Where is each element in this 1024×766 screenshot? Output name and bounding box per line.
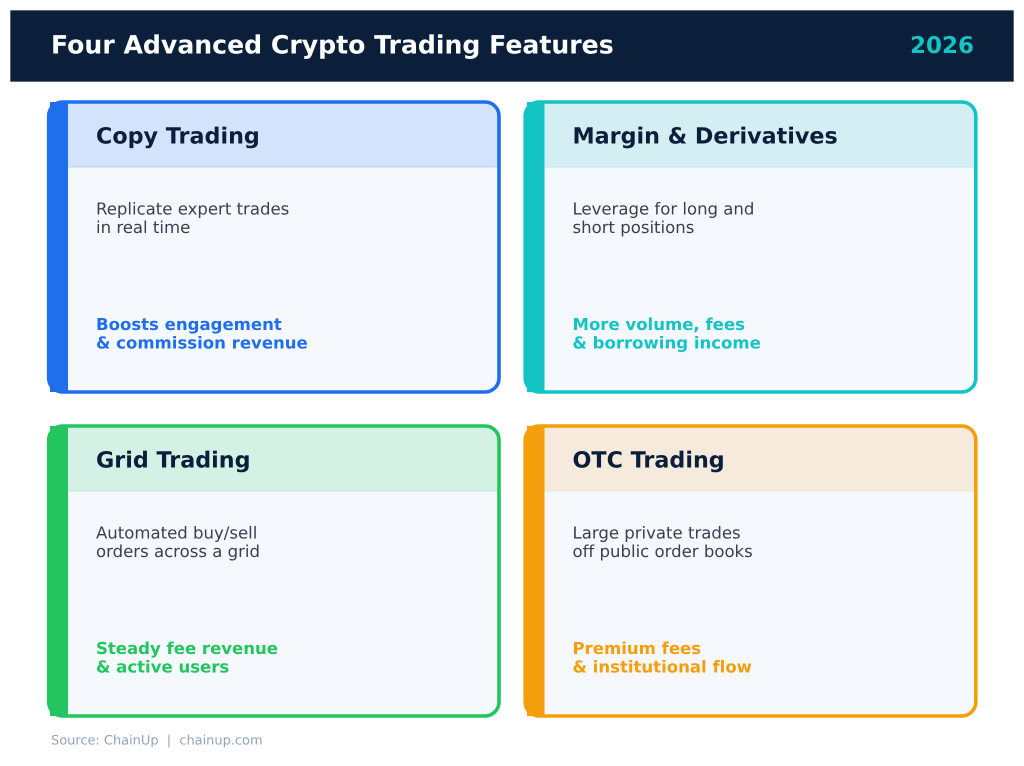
source footer: Source: ChainUp | chainup.com [51, 734, 263, 748]
benefit: Boosts engagement [96, 315, 282, 334]
description: Leverage for long and [572, 200, 754, 218]
description: Automated buy/sell [96, 524, 257, 542]
benefit: & borrowing income [572, 334, 761, 352]
panel: OTC Trading [525, 426, 976, 716]
heading: OTC Trading [572, 448, 725, 474]
description: off public order books [572, 542, 753, 561]
heading: Copy Trading [96, 124, 260, 150]
description: Large private trades [572, 524, 741, 542]
benefit: & active users [96, 658, 229, 676]
benefit: & commission revenue [96, 334, 308, 352]
benefit: Steady fee revenue [96, 639, 278, 658]
heading: Margin & Derivatives [572, 124, 838, 150]
benefit: Premium fees [572, 639, 701, 658]
title: Four Advanced Crypto Trading Features [51, 30, 614, 60]
benefit: & institutional flow [572, 658, 752, 676]
description: orders across a grid [96, 542, 260, 561]
heading: Grid Trading [96, 448, 251, 474]
benefit: More volume, fees [572, 315, 745, 334]
panel: Margin & Derivatives [525, 102, 976, 392]
panel: Grid Trading [49, 426, 499, 716]
description: in real time [96, 218, 190, 237]
header banner [10, 10, 1014, 82]
year: 2026 [910, 33, 974, 59]
description: Replicate expert trades [96, 200, 289, 218]
description: short positions [572, 218, 694, 237]
panel: Copy Trading [49, 102, 499, 392]
